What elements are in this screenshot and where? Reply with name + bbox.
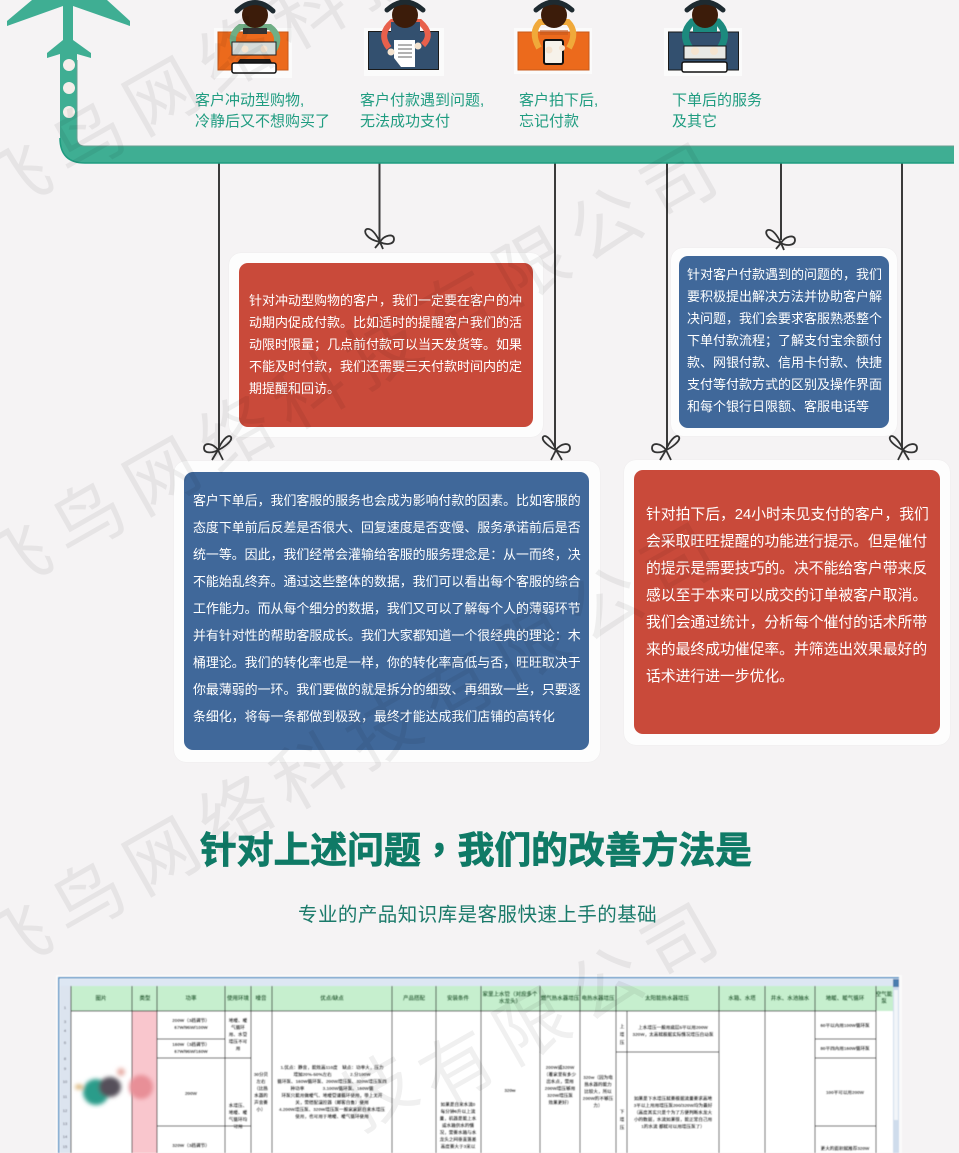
table body text: 200W增压够用 <box>545 1085 576 1092</box>
subheading: 专业的产品知识库是客服快速上手的基础 <box>298 904 657 926</box>
panel: forgot to pay solution: 来的最终成功催促率。并筛选出效果最好的 <box>646 642 927 658</box>
table body text: 地暖、暖 <box>229 1017 248 1024</box>
row numbers: 1 <box>64 1005 67 1010</box>
heading: 针对上述问题，我们的改善方法是 <box>200 830 752 871</box>
pink type column <box>132 1011 157 1153</box>
table body text: 1.优点：静音，能效高110度 缺点：功率大，压力 <box>280 1064 384 1071</box>
row numbers: 4 <box>64 1028 67 1033</box>
table body text: 320W，太高就根据实际情况增压自动泵 <box>633 1031 714 1038</box>
table header text: 地暖、暖气循环 <box>826 994 865 1002</box>
table body text: （比热 <box>254 1085 268 1092</box>
table body text: 200W或320W <box>546 1064 575 1071</box>
panel: service solution: 桶理论。我们的转化率也是一样，你的转化率高低与否，旺旺取决于 <box>193 655 581 670</box>
table body text: 量，机器是能上水 <box>440 1115 477 1122</box>
table body text: 种功率 3.100W循环泵、160W循 <box>291 1085 374 1092</box>
hanging strings <box>219 163 902 448</box>
panel: payment problem solution: 决问题，我们会要求客服熟悉整个 <box>687 311 882 326</box>
table body text: 水器的 <box>254 1092 268 1099</box>
table body text: 小的数据，水流如果很，能正常自己用 <box>634 1116 712 1123</box>
table body text: 67W/95W/100W <box>174 1025 208 1030</box>
table body text: 320W（3档调节） <box>172 1142 210 1149</box>
table body text: 每分钟6升以上流 <box>441 1108 476 1115</box>
icon: person on laptop at navy desk <box>668 0 739 73</box>
table body text: 用、水管 <box>229 1031 248 1038</box>
panel: forgot to pay solution: 我们会通过统计，分析每个催付的话术所带 <box>646 615 927 631</box>
row numbers: 12 <box>63 1108 68 1113</box>
table header text: 电热水器增压 <box>581 994 615 1002</box>
table header text: 安装条件 <box>447 994 469 1002</box>
panel: forgot to pay solution: 感以至于本来可以成交的订单被客户取消。 <box>646 588 927 604</box>
panel: service solution: 不能始乱终弃。通过这些整体的数据，我们可以看出每个客服的综合 <box>193 574 581 589</box>
table body text: 效果更好） <box>549 1099 571 1106</box>
label: after-sale service <box>672 92 762 130</box>
panel halo: payment card <box>671 248 897 436</box>
table body text: 龙头之间垂直落差 <box>440 1136 477 1143</box>
table header text: 水箱、水塔 <box>728 994 756 1002</box>
table header text: 燃气热水器增压 <box>541 994 580 1002</box>
table body text: 压 <box>620 1040 625 1046</box>
table body text: 可用 <box>233 1124 243 1130</box>
label: impulse shopping <box>195 92 330 130</box>
table header text: 类型 <box>139 994 151 1002</box>
table body text: 320W增压泵 <box>547 1092 573 1099</box>
table body text: 1的水流 都就可以用增压泵了） <box>641 1123 705 1130</box>
table body text: 增 <box>620 1031 625 1038</box>
blurred product photo <box>75 1068 153 1105</box>
label: forgot to pay <box>519 92 598 130</box>
bow: right of service card <box>543 436 570 460</box>
panel halo: reminder card <box>624 460 950 745</box>
table body text: 使用，也可用于地暖、暖气循环使用 <box>295 1113 369 1120</box>
grid lines <box>71 986 876 1153</box>
row numbers: 11 <box>63 1094 68 1099</box>
table body text: 增压不可 <box>229 1038 248 1045</box>
bow: right of reminder card <box>890 436 917 460</box>
table header text: 产品搭配 <box>403 994 425 1002</box>
panel: service solution: 你最薄弱的一环。我们要做的就是拆分的细致、再细致一些，只要逐 <box>193 682 581 697</box>
table body text: 如果是下水增压就要根据流量要求高地 <box>634 1095 712 1102</box>
label: forgot to pay: 忘记付款 <box>519 113 579 130</box>
table body text: 用 <box>236 1046 241 1052</box>
label: impulse shopping: 客户冲动型购物, <box>195 92 304 109</box>
table body text: 水增压、 <box>229 1102 247 1109</box>
table body text: （看家里有多少 <box>544 1071 576 1078</box>
row numbers: 6 <box>64 1040 67 1045</box>
table body text: 循环泵、160W循环泵、200W增压泵、320W增压泵四 <box>277 1078 387 1085</box>
row number strip <box>60 986 71 1153</box>
panel: forgot to pay solution: 的提示是需要技巧的。决不能给客户带来反 <box>646 561 927 577</box>
panel: impulse shopping solution: 动限时限量；几点前付款可以当天发货等。如果 <box>249 337 522 352</box>
table body text: 上 <box>620 1023 625 1029</box>
table body text: 80平四内用160W循环泵 <box>820 1045 870 1052</box>
table body text: 200W的不够压 <box>583 1095 614 1102</box>
table body text: 上水增压一般用底层5平以用200W <box>638 1024 709 1031</box>
panel: payment problem solution: 下单付款流程；了解支付宝余额付 <box>687 333 882 348</box>
panel: forgot to pay solution: 针对拍下后，24小时未见支付的客户，我们 <box>646 507 929 523</box>
bow: left of reminder card <box>652 436 679 460</box>
table header text <box>95 990 893 1005</box>
panel: impulse shopping solution: 动期内促成付款。比如适时的提醒客户我们的活 <box>249 315 522 330</box>
watermark: 有限公司 <box>407 884 743 1122</box>
table header text: 井水、水池抽水 <box>771 994 810 1002</box>
panel: payment problem solution: 支付等付款方式的区别及操作界面 <box>687 377 882 392</box>
table body text <box>172 1017 870 1152</box>
table header text: 泵 <box>881 998 887 1005</box>
panel: payment problem solution: 和每个银行日限额、客服电话等 <box>687 399 869 414</box>
column letter strip <box>60 979 893 986</box>
airplane timeline arrow <box>7 0 954 163</box>
table header text: 图片 <box>95 994 107 1002</box>
table body text: 67W/95W/160W <box>174 1049 208 1054</box>
table body text: 下 <box>620 1109 625 1115</box>
panel halo: impulse card <box>229 253 543 437</box>
table body text: 声音要 <box>254 1099 268 1106</box>
table header text: 使用环境 <box>227 994 249 1002</box>
row numbers: 3 <box>64 1019 67 1024</box>
table body text: 200W（3档调节） <box>172 1017 210 1024</box>
table body text: 3平以上用用增压泵200/320W均为最好 <box>634 1102 713 1109</box>
panel: forgot to pay solution: 话术进行进一步优化。 <box>646 669 794 685</box>
row numbers: 13 <box>63 1121 68 1126</box>
table body text: 小） <box>256 1106 266 1113</box>
table body text: 200W <box>185 1091 198 1096</box>
panel: service solution: 统一等。因此，我们经常会灌输给客服的服务理念是：从一而终，决 <box>193 547 581 562</box>
table body text: 4.200W增压泵、320W增压泵一般家家庭自来水增压 <box>279 1106 385 1113</box>
panel: service solution: 态度下单前后反差是否很大、回复速度是否变慢、服务承诺前后是否 <box>193 520 581 535</box>
table body text: 或水箱供水的情 <box>442 1122 474 1129</box>
label: payment problems <box>360 92 484 130</box>
watermark: 技 <box>328 1041 431 1146</box>
table header text: 空气能 <box>876 990 893 998</box>
row numbers: 15 <box>63 1144 68 1149</box>
table body text: 高度要大于3米以 <box>441 1143 476 1150</box>
scrollbar <box>893 979 899 1153</box>
table body text: 比较大，所以 <box>584 1088 612 1095</box>
icon: person with tablet at orange desk <box>518 0 590 70</box>
table body text: 气循环 <box>231 1024 245 1031</box>
table body text: 压 <box>620 1125 625 1131</box>
panel halo: service card <box>174 461 600 762</box>
table body text: 更大的面积就推荐320W <box>821 1145 870 1152</box>
panel: impulse shopping solution: 不能及时付款，我们还需要三天付款时间内的定 <box>249 359 522 374</box>
table body text: 如果是自来水流0 <box>441 1101 476 1108</box>
table body text: 320w（因为电 <box>583 1074 613 1081</box>
table body text: 左右 <box>256 1078 266 1085</box>
row numbers: 9 <box>64 1066 67 1071</box>
table body text: 环泵只能用做暖气、地暖管道循环使用，带上无开 <box>281 1092 383 1099</box>
label: after-sale service: 下单后的服务 <box>672 92 762 109</box>
table body text: 关，需搭配温控器（邮客自备）使用 <box>295 1099 369 1106</box>
panel: service solution: 并有针对性的帮助客服成长。我们大家都知道一个很经典的理论：木 <box>193 628 581 643</box>
table body text: 气循环均 <box>229 1116 248 1123</box>
table header text: 太阳能热水器增压 <box>645 994 689 1002</box>
bow: right top <box>766 230 795 250</box>
label: payment problems: 客户付款遇到问题, <box>360 92 484 109</box>
panel: impulse shopping solution: 针对冲动型购物的客户，我们一定要在客户的冲 <box>249 293 522 308</box>
label: after-sale service: 及其它 <box>672 113 717 130</box>
panel: service solution: 工作能力。而从每个细分的数据，我们又可以了解每个人的薄弱环节 <box>193 601 581 616</box>
table body text: 地暖、暖 <box>229 1109 248 1116</box>
table body text: 100平可以用200W <box>826 1090 865 1096</box>
icon: person with paper at navy desk <box>368 0 439 70</box>
table body text: 增加20%-50%左右 2.分100W <box>293 1071 371 1078</box>
table body text: 320w <box>504 1088 516 1093</box>
table header text: 水龙头） <box>499 997 521 1005</box>
table body text: （高度其实只是个为了方便判断水龙大 <box>634 1109 712 1116</box>
table body text: 力） <box>593 1102 603 1109</box>
table body text: 60平以内用100W循环泵 <box>820 1022 870 1029</box>
label: forgot to pay: 客户拍下后, <box>519 92 598 109</box>
panel: payment problem solution <box>679 256 889 428</box>
panel: payment problem solution: 要积极提出解决方法并协助客户解 <box>687 289 882 304</box>
row numbers: 8 <box>64 1056 67 1061</box>
table header text: 优点/缺点 <box>320 994 344 1002</box>
table header text: 噪音 <box>255 994 267 1002</box>
panel: service solution: 条细化，将每一条都做到极致，最终才能达成我们店铺的高转化 <box>193 709 555 724</box>
table body text: 热水器的能力 <box>584 1081 612 1088</box>
row numbers: 10 <box>63 1079 68 1084</box>
table body text: 出水点，需用 <box>546 1078 574 1085</box>
table header text: 家里上水管（对应多个 <box>482 990 538 998</box>
icon: person shopping at orange desk <box>218 0 288 74</box>
bow: center top <box>365 229 394 249</box>
bow: left of service card <box>204 436 231 460</box>
panel: service solution <box>184 472 589 750</box>
row numbers: 14 <box>63 1134 68 1139</box>
label: payment problems: 无法成功支付 <box>360 113 450 130</box>
table body text: 160W（3档调节） <box>172 1041 210 1048</box>
panel: payment problem solution: 针对客户付款遇到的问题的，我们 <box>687 267 882 282</box>
table body text: 30分贝 <box>254 1071 269 1078</box>
header row <box>71 986 893 1011</box>
table header text: 功率 <box>185 994 197 1002</box>
label: impulse shopping: 冷静后又不想购买了 <box>195 113 330 130</box>
row numbers <box>63 1005 68 1149</box>
panel: impulse shopping solution: 期提醒和回访。 <box>249 381 340 396</box>
panel: payment problem solution: 款、网银付款、信用卡付款、快捷 <box>687 355 882 370</box>
panel: impulse shopping solution <box>239 263 533 427</box>
table body text: 增 <box>620 1116 625 1123</box>
panel: forgot to pay solution <box>634 470 940 734</box>
table body text: 况，需要水箱与水 <box>440 1129 477 1136</box>
panel: forgot to pay solution: 会采取旺旺提醒的功能进行提示。但是催付 <box>646 534 927 550</box>
panel: service solution: 客户下单后，我们客服的服务也会成为影响付款的因素。比如客服的 <box>193 493 581 508</box>
